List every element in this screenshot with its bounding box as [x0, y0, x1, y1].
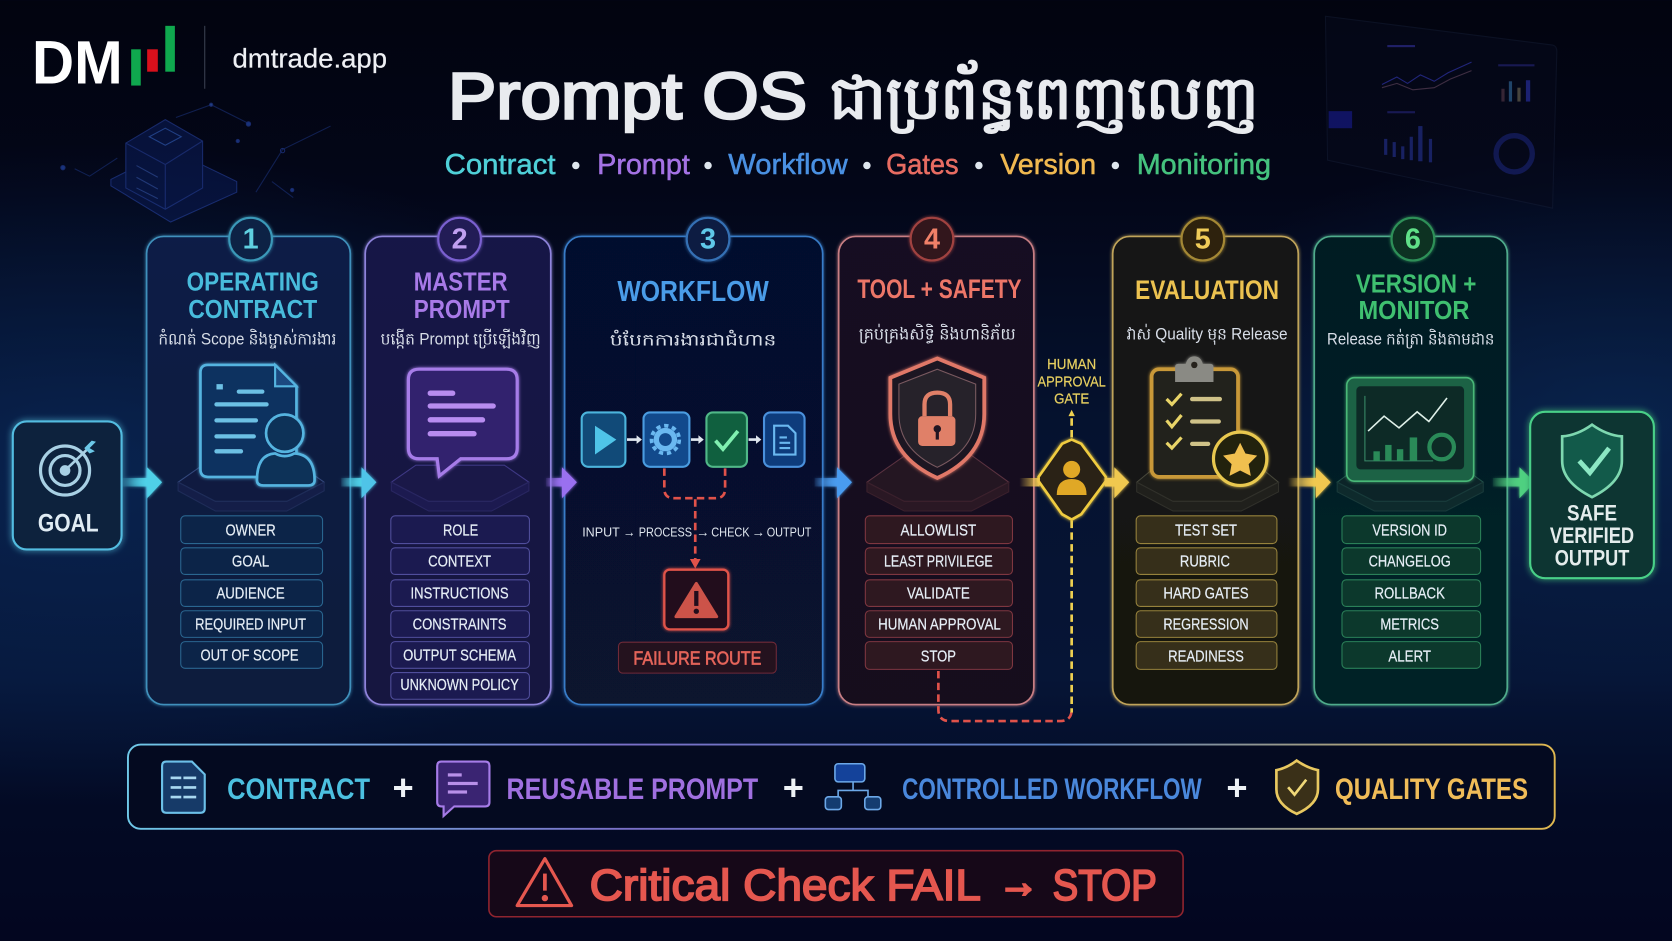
evaluation chips: RUBRIC — [1180, 553, 1230, 570]
safety chips: STOP — [921, 648, 956, 665]
description: បង្កើត Prompt ប្រើឡើងវិញ — [381, 329, 541, 350]
label: reusable prompt: REUSABLE PROMPT — [507, 773, 758, 806]
subtitle keywords: Workflow — [728, 149, 848, 181]
evaluation chips: READINESS — [1168, 648, 1244, 665]
icon: reusable prompt — [437, 762, 489, 816]
human approval gate label: HUMAN — [1047, 357, 1096, 373]
label: controlled workflow: CONTROLLED WORKFLOW — [902, 773, 1202, 806]
decoration: dashboard — [1325, 16, 1557, 208]
workflow steps icons — [582, 412, 805, 467]
decoration: isometric server — [61, 103, 331, 222]
arrow: gate to evaluation — [1105, 467, 1129, 498]
step number 3: 3 — [700, 224, 716, 256]
icon: contract document with person — [200, 365, 315, 485]
subtitle keywords — [445, 149, 1271, 181]
stop message — [590, 858, 1157, 910]
heading — [414, 268, 510, 324]
failure route label: FAILURE ROUTE — [633, 649, 761, 669]
panel 3: workflow — [565, 218, 823, 705]
arrow: goal to contract — [123, 467, 162, 498]
prompt parts chips: CONTEXT — [428, 553, 492, 570]
version chips: METRICS — [1380, 616, 1439, 633]
heading: CONTRACT — [188, 296, 318, 324]
step number 6: 6 — [1405, 224, 1421, 256]
arrow: version to output — [1493, 467, 1534, 498]
failure route label — [618, 642, 776, 673]
icon: clipboard checklist with star — [1152, 356, 1267, 485]
goal box — [13, 421, 122, 549]
icon: failure warning — [664, 570, 728, 629]
safety chips: LEAST PRIVILEGE — [884, 553, 993, 570]
arrow: evaluation to version — [1288, 467, 1331, 498]
stop message: → — [998, 858, 1039, 907]
heading: EVALUATION — [1135, 275, 1279, 305]
step number 3 — [687, 218, 729, 260]
goal label: GOAL — [38, 510, 99, 537]
failure dashed route — [664, 468, 725, 569]
evaluation chips: TEST SET — [1175, 523, 1237, 540]
description: គ្រប់គ្រងសិទ្ធិ និងហានិភ័យ — [859, 322, 1016, 344]
prompt parts chips: INSTRUCTIONS — [411, 585, 509, 602]
human approval gate label: APPROVAL — [1038, 374, 1106, 390]
icon: target with arrow — [41, 441, 96, 495]
subtitle keywords: Version — [1000, 149, 1096, 181]
version chips: VERSION ID — [1372, 523, 1447, 540]
input process check output: → — [696, 525, 710, 540]
logo: DM with bars: DM — [32, 28, 123, 96]
checklist chips: OWNER — [226, 523, 276, 540]
label: quality gates: QUALITY GATES — [1335, 773, 1528, 806]
safe verified output box — [1530, 412, 1654, 578]
input process check output: → — [752, 525, 765, 540]
plus: + — [392, 767, 414, 808]
icon: contract — [162, 762, 205, 813]
formula bar — [128, 745, 1555, 829]
stop message: Critical Check FAIL — [590, 861, 981, 910]
subtitle keywords: Contract — [445, 149, 556, 181]
icon: quality gates — [1276, 761, 1318, 814]
arrow: contract to prompt — [341, 467, 376, 498]
human approval gate label — [1038, 357, 1106, 407]
evaluation chips: REGRESSION — [1163, 616, 1249, 633]
input process check output: PROCESS — [639, 525, 692, 540]
prompt parts chips: OUTPUT SCHEMA — [403, 647, 517, 664]
checklist chips: REQUIRED INPUT — [195, 616, 306, 633]
icon: controlled workflow — [825, 764, 881, 810]
title — [448, 60, 1258, 135]
checklist chips — [181, 516, 323, 668]
heading — [1356, 270, 1476, 325]
stop banner — [489, 851, 1183, 917]
logo: DM with bars — [32, 26, 387, 96]
pedestal — [1137, 468, 1279, 511]
version chips: CHANGELOG — [1369, 553, 1451, 570]
panel 5: evaluation — [1113, 218, 1298, 705]
plus: + — [1226, 767, 1248, 808]
icon: warning triangle — [517, 859, 572, 906]
description: វាស់ Quality មុន Release — [1127, 323, 1288, 345]
panel 4: tool + safety — [839, 218, 1034, 705]
panel 2: master prompt — [365, 218, 551, 705]
stop message: STOP — [1052, 861, 1157, 910]
arrow: workflow to tool — [815, 467, 852, 498]
evaluation chips: HARD GATES — [1163, 585, 1249, 602]
icon: prompt speech bubble — [408, 369, 517, 476]
heading — [187, 268, 319, 324]
prompt parts chips: UNKNOWN POLICY — [400, 677, 519, 694]
step number 4 — [911, 218, 953, 260]
step number 1 — [229, 218, 272, 260]
pedestal — [867, 455, 1009, 511]
heading: MASTER — [414, 268, 508, 296]
version chips: ALERT — [1388, 648, 1431, 665]
heading: TOOL + SAFETY — [857, 274, 1022, 304]
icon: shield check — [1562, 425, 1622, 497]
safety chips — [865, 516, 1012, 669]
output label: VERIFIED — [1550, 523, 1634, 548]
step number 4: 4 — [924, 224, 940, 256]
prompt parts chips: ROLE — [443, 523, 478, 540]
input process check output: OUTPUT — [767, 525, 811, 540]
input process check output: CHECK — [711, 525, 750, 540]
pedestal — [178, 465, 324, 511]
logo: DM with bars: dmtrade.app — [232, 43, 387, 73]
human approval gate label: GATE — [1054, 391, 1089, 407]
pedestal — [1337, 468, 1483, 511]
subtitle keywords: Monitoring — [1137, 149, 1271, 181]
red dashed stop route — [938, 671, 1072, 721]
heading: WORKFLOW — [617, 276, 770, 308]
panel 6: version + monitor — [1314, 218, 1507, 705]
plus: + — [783, 767, 804, 808]
human approval gate diamond — [1039, 440, 1106, 520]
title: Prompt OS — [448, 60, 807, 134]
checklist chips: OUT OF SCOPE — [200, 647, 299, 664]
step number 5: 5 — [1195, 224, 1211, 256]
subtitle keywords: Prompt — [597, 149, 690, 181]
description: កំណត់ Scope និងម្ចាស់ការងារ — [158, 329, 336, 350]
version chips: ROLLBACK — [1374, 585, 1445, 602]
label: contract: CONTRACT — [227, 773, 370, 806]
heading: OPERATING — [187, 268, 319, 296]
step number 5 — [1181, 218, 1224, 260]
description: Release កត់ត្រា និងតាមដាន — [1327, 329, 1494, 350]
checklist chips: AUDIENCE — [216, 585, 285, 602]
icon: monitor with chart — [1347, 378, 1474, 481]
output label — [1550, 501, 1634, 570]
panel 1: operating contract — [147, 218, 350, 705]
prompt parts chips: CONSTRAINTS — [413, 616, 507, 633]
safety chips: ALLOWLIST — [901, 523, 977, 540]
prompt parts chips — [391, 516, 529, 699]
evaluation chips — [1136, 516, 1277, 669]
arrow: tool to gate — [1019, 478, 1040, 486]
icon: shield with lock — [890, 359, 984, 478]
output label: SAFE — [1567, 501, 1617, 526]
safety chips: HUMAN APPROVAL — [878, 616, 1001, 633]
gold dashed connectors — [1070, 416, 1073, 713]
pedestal — [391, 465, 529, 511]
title: ជាប្រព័ន្ធពេញលេញ — [830, 60, 1258, 135]
step number 1: 1 — [243, 224, 259, 256]
arrow: prompt to workflow — [546, 467, 577, 498]
step number 6 — [1392, 218, 1434, 260]
description: បំបែកការងារជាជំហាន — [610, 330, 776, 350]
input process check output — [582, 525, 811, 540]
step number 2 — [438, 218, 481, 260]
safety chips: VALIDATE — [907, 585, 970, 602]
heading: PROMPT — [414, 296, 510, 324]
heading: VERSION + — [1356, 270, 1476, 298]
heading: MONITOR — [1359, 297, 1469, 325]
version chips — [1342, 516, 1481, 668]
subtitle keywords: Gates — [886, 149, 959, 181]
step number 2: 2 — [452, 224, 468, 256]
output label: OUTPUT — [1555, 545, 1630, 570]
checklist chips: GOAL — [232, 553, 270, 570]
input process check output: INPUT → — [582, 525, 636, 540]
